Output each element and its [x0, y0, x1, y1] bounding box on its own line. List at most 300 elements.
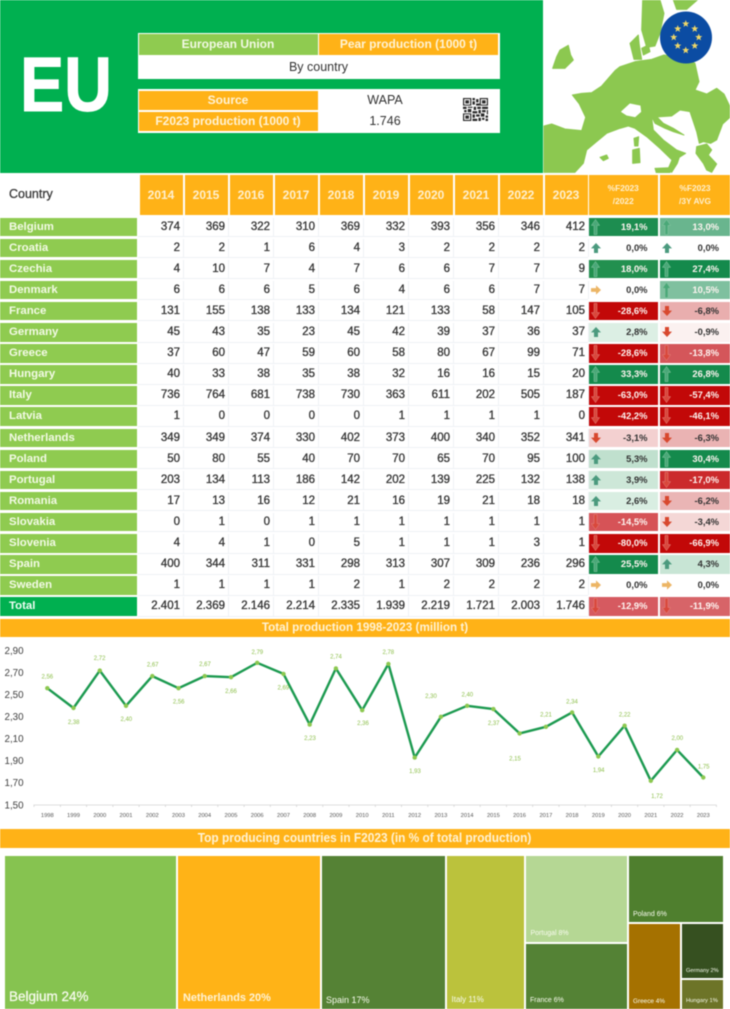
- row: Hungary: 33,3%: [621, 368, 648, 379]
- row: Italy: 736: [161, 389, 180, 401]
- row: Germany: 36: [527, 326, 540, 338]
- row: Portugal: 113: [252, 474, 270, 486]
- row: Czechia: 7: [489, 263, 495, 275]
- x axis year labels: 2005: [225, 813, 237, 819]
- row: Slovakia: -3,4%: [694, 516, 719, 527]
- row: Denmark: 6: [354, 284, 360, 296]
- x axis year labels: 2010: [356, 813, 369, 819]
- row: Romania: 13: [212, 495, 225, 507]
- row: Spain: [0, 554, 730, 575]
- x axis year labels: 2021: [644, 813, 657, 819]
- row: Sweden: 1: [264, 579, 270, 591]
- row: Czechia: [0, 259, 730, 279]
- row: Total: 2.214: [286, 600, 315, 612]
- x axis year labels: 2007: [277, 813, 290, 819]
- row: Sweden: 1: [399, 579, 405, 591]
- tile: Germany: [682, 924, 723, 978]
- data labels: 2,74: [330, 654, 342, 660]
- year head 2019: [364, 175, 408, 215]
- label: European Union: [138, 34, 318, 54]
- row: Romania: 17: [167, 495, 180, 507]
- row: Poland: 70: [347, 453, 360, 465]
- row: France: France: [9, 305, 46, 317]
- tile: Hungary: Hungary 1%: [686, 998, 718, 1004]
- row: Spain: 311: [252, 558, 270, 570]
- row: Slovenia: 3: [534, 537, 540, 549]
- row: Latvia: 1: [444, 410, 450, 422]
- data labels: 2,36: [357, 721, 369, 727]
- row: Portugal: 202: [386, 474, 405, 486]
- row: Germany: 23: [302, 326, 315, 338]
- data labels: 2,79: [251, 650, 264, 656]
- row: Spain: 298: [341, 558, 360, 570]
- label: Pear production: [319, 34, 498, 54]
- row: Czechia: 27,4%: [692, 263, 719, 274]
- row: Hungary: 32: [392, 368, 405, 380]
- map: Sardinia: [633, 148, 640, 163]
- x axis year labels: 2023: [697, 813, 710, 819]
- year head 2014: [140, 175, 182, 215]
- row: Portugal: 225: [476, 474, 495, 486]
- row: Denmark: 6: [489, 284, 495, 296]
- treemap: top producing countries: [4, 855, 724, 1009]
- year head 2018: [320, 175, 362, 215]
- row: Romania: 19: [437, 495, 450, 507]
- row: Sweden: 0,0%: [698, 579, 719, 590]
- x axis year labels: [41, 813, 710, 819]
- row: Croatia: 0,0%: [698, 242, 719, 253]
- row: France: 133: [296, 305, 315, 317]
- row: Total: -12,9%: [618, 600, 648, 611]
- year head 2016: [230, 175, 272, 215]
- info box: source and production: [138, 88, 500, 132]
- map: mainland: [544, 55, 730, 172]
- head: F2023 vs 3Y average: /3Y AVG: [679, 196, 711, 206]
- row: Total: 1.721: [466, 600, 495, 612]
- x axis year labels: 1999: [67, 813, 80, 819]
- row: Slovakia: 1: [354, 516, 360, 528]
- row: Romania: 21: [347, 495, 360, 507]
- row: France: 121: [386, 305, 405, 317]
- icon: EU flag: [660, 12, 712, 64]
- row: Netherlands: -6,3%: [694, 432, 719, 442]
- y axis labels: 2,70: [4, 668, 24, 679]
- row: Portugal: 138: [566, 474, 585, 486]
- row: Sweden: 2: [579, 579, 585, 591]
- tile: Poland: Poland 6%: [633, 910, 667, 918]
- tile: Spain: [322, 856, 445, 1009]
- row: Latvia: 0: [264, 410, 270, 422]
- row: Denmark: 6: [174, 284, 180, 296]
- data labels: 2,38: [68, 720, 80, 726]
- tile: Greece: [629, 924, 680, 1009]
- label: F2023 production: F2023 production (1000 t): [155, 114, 301, 128]
- icon: QR code: [462, 97, 489, 122]
- row: Latvia: 0: [309, 410, 315, 422]
- row: Slovakia: 1: [399, 516, 405, 528]
- row: Slovakia: -14,5%: [618, 516, 648, 527]
- row: Germany: [0, 322, 730, 343]
- map: Balearic islands: [600, 155, 608, 161]
- x axis year labels: 2009: [329, 813, 342, 819]
- row: Belgium: 356: [476, 220, 495, 232]
- row: Slovakia: 1: [219, 516, 225, 528]
- row: Croatia: 2: [174, 242, 180, 254]
- row: France: 131: [161, 305, 180, 317]
- data labels: 1,72: [651, 794, 663, 800]
- row: Italy: 505: [521, 389, 540, 401]
- row: Latvia: Latvia: [9, 410, 42, 422]
- row: Greece: -13,8%: [689, 347, 719, 358]
- label: By country: [138, 55, 498, 78]
- row: Netherlands: 374: [251, 432, 270, 444]
- row: Slovakia: 0: [174, 516, 180, 528]
- row: Sweden: 2: [534, 579, 540, 591]
- year head 2017: 2017: [283, 188, 309, 202]
- row: Netherlands: 373: [386, 432, 405, 444]
- map: Greece: [696, 144, 717, 172]
- row: Sweden: 1: [309, 579, 315, 591]
- tile: Belgium: Belgium 24%: [9, 989, 89, 1004]
- row: Germany: 43: [212, 326, 225, 338]
- row: Latvia: [0, 406, 730, 427]
- data labels: 1,94: [593, 768, 605, 774]
- row: Poland: 30,4%: [692, 453, 719, 464]
- row: Slovenia: 5: [354, 537, 360, 549]
- row: Total: 1.939: [376, 600, 405, 612]
- year head 2015: 2015: [193, 188, 219, 202]
- row: Latvia: 1: [534, 410, 540, 422]
- row: Germany: 45: [347, 326, 360, 338]
- row: Belgium: 19,1%: [621, 220, 648, 232]
- row: Denmark: 6: [444, 284, 450, 296]
- row: Croatia: [0, 238, 720, 258]
- row: Romania: Romania: [9, 495, 57, 507]
- row: Netherlands: 349: [206, 432, 225, 444]
- row: Netherlands: 341: [566, 432, 585, 444]
- data labels: 1,93: [409, 769, 421, 775]
- production line: [47, 663, 703, 781]
- row: Germany: 2,8%: [626, 326, 648, 337]
- row: Belgium: [0, 217, 730, 237]
- row: Slovakia: 1: [489, 516, 495, 528]
- data labels: 2,34: [566, 699, 578, 705]
- row: Romania: 21: [482, 495, 495, 507]
- row: Sweden: [0, 575, 720, 596]
- x axis year labels: 2012: [408, 813, 421, 819]
- row: Romania: 18: [572, 495, 585, 507]
- row: Hungary: Hungary: [9, 368, 55, 380]
- row: Italy: -63,0%: [618, 389, 648, 400]
- row: Netherlands: 352: [521, 432, 540, 444]
- row: France: -6,8%: [694, 305, 719, 316]
- row: Greece: 60: [347, 347, 360, 359]
- head: F2023 vs 2022: [589, 175, 658, 215]
- row: Portugal: Portugal: [9, 474, 55, 486]
- year head 2023: 2023: [553, 188, 579, 202]
- row: Netherlands: 340: [476, 432, 495, 444]
- row: Greece: 37: [167, 347, 180, 359]
- x axis year labels: 2001: [120, 813, 132, 819]
- y axis labels: 2,90: [4, 646, 24, 657]
- row: Hungary: 15: [527, 368, 540, 380]
- row: Total: 2.335: [331, 600, 360, 612]
- row: Greece: 67: [482, 347, 495, 359]
- row: Spain: Spain: [9, 558, 40, 570]
- row: Croatia: 3: [399, 242, 405, 254]
- y axis labels: 2,30: [4, 712, 24, 723]
- row: Germany: -0,9%: [694, 326, 719, 337]
- map: Corsica: [634, 137, 639, 146]
- row: Latvia: -46,1%: [689, 410, 719, 421]
- tile: Portugal: [526, 856, 627, 942]
- row: Portugal: 134: [206, 474, 225, 486]
- y axis labels: 2,10: [4, 734, 24, 745]
- x axis year labels: 2016: [513, 813, 526, 819]
- row: Total: -11,9%: [690, 600, 719, 611]
- row: France: 138: [251, 305, 270, 317]
- row: France: 155: [206, 305, 225, 317]
- row: Czechia: 4: [309, 263, 315, 275]
- row: Czechia: 7: [264, 263, 270, 275]
- data labels: 2,67: [199, 662, 211, 668]
- tile: Spain: Spain 17%: [326, 994, 370, 1004]
- row: Hungary: 38: [257, 368, 270, 380]
- row: France: 58: [482, 305, 495, 317]
- row: Latvia: 1: [489, 410, 495, 422]
- row: Germany: 42: [392, 326, 405, 338]
- row: Denmark: Denmark: [9, 284, 58, 296]
- map: Danish islands: [642, 45, 650, 55]
- header band: [0, 0, 730, 174]
- year head 2022: 2022: [508, 188, 534, 202]
- row: Belgium: 310: [296, 220, 315, 232]
- value: WAPA: [318, 91, 452, 110]
- row: Romania: 12: [302, 495, 315, 507]
- x axis year labels: 2018: [566, 813, 579, 819]
- row: Belgium: 13,0%: [692, 220, 719, 232]
- row: Poland: 100: [566, 453, 585, 465]
- row: Sweden: 2: [489, 579, 495, 591]
- row: Italy: 681: [251, 389, 270, 401]
- row: Netherlands: Netherlands: [9, 432, 75, 444]
- row: Belgium: 332: [386, 220, 405, 232]
- row: Greece: 58: [392, 347, 405, 359]
- row: Slovenia: 0: [309, 537, 315, 549]
- data labels: 2,78: [382, 650, 395, 656]
- row: Poland: 95: [527, 453, 540, 465]
- row: Romania: 16: [392, 495, 405, 507]
- year head 2015: [184, 175, 228, 215]
- row: Belgium: 322: [251, 220, 270, 232]
- row: Spain: 4,3%: [698, 558, 719, 569]
- row: Poland: [0, 449, 730, 469]
- tile: Netherlands: [178, 856, 320, 1009]
- x axis year labels: 2013: [434, 813, 447, 819]
- row: Croatia: Croatia: [9, 242, 48, 254]
- map: Switzerland gap: [622, 104, 641, 117]
- row: Slovenia: 4: [219, 537, 225, 549]
- row: Slovenia: 1: [444, 537, 450, 549]
- row: Belgium: 369: [341, 220, 360, 232]
- row: Poland: Poland: [9, 453, 47, 465]
- row: Slovakia: Slovakia: [9, 516, 55, 528]
- row: Poland: 50: [167, 453, 180, 465]
- row: Belgium: 346: [521, 220, 540, 232]
- column head: Country: Country: [9, 187, 53, 201]
- row: Latvia: 0: [219, 410, 225, 422]
- x axis year labels: 2022: [671, 813, 684, 819]
- y axis labels: 1,50: [4, 800, 24, 812]
- data labels: 2,37: [488, 721, 500, 727]
- row: Sweden: 2: [444, 579, 450, 591]
- tile: France: France 6%: [530, 997, 564, 1004]
- row: Croatia: 2: [489, 242, 495, 254]
- row: Slovenia: 1: [399, 537, 405, 549]
- value: 1.746: 1.746: [369, 114, 401, 128]
- row: Slovenia: -80,0%: [618, 537, 648, 548]
- x axis year labels: 2000: [93, 813, 106, 819]
- row: Total: Total: [9, 600, 35, 612]
- year head 2017: [274, 175, 318, 215]
- row: Sweden: 2: [354, 579, 360, 591]
- row: Croatia: 2: [219, 242, 225, 254]
- data labels: 1,75: [698, 764, 710, 770]
- row: Romania: -6,2%: [694, 495, 719, 506]
- row: Portugal: 186: [296, 474, 315, 486]
- row: Greece: Greece: [9, 347, 48, 359]
- row: Poland: 70: [482, 453, 495, 465]
- row: Denmark: 0,0%: [626, 284, 648, 295]
- tile: Italy: [447, 856, 524, 1009]
- data point markers: [45, 661, 706, 783]
- x axis year labels: 2008: [303, 813, 316, 819]
- value: WAPA: WAPA: [367, 93, 403, 107]
- year head 2022: [500, 175, 542, 215]
- x axis line: [34, 805, 716, 807]
- info box: region and product: [138, 33, 500, 78]
- row: Belgium: 369: [206, 220, 225, 232]
- row: Italy: 730: [341, 389, 360, 401]
- row: France: 133: [431, 305, 450, 317]
- row: Total: [0, 596, 730, 617]
- label: Source: [138, 91, 318, 110]
- row: France: 147: [521, 305, 540, 317]
- row: Greece: 59: [302, 347, 315, 359]
- row: Hungary: 33: [212, 368, 225, 380]
- row: Portugal: [0, 470, 730, 490]
- tile: Greece: Greece 4%: [633, 998, 665, 1004]
- row: Spain: 309: [476, 558, 495, 570]
- section heading: top producing countries: Top producing countries in F2023 (in % of total production): [198, 831, 532, 845]
- x axis year labels: 2011: [382, 813, 395, 819]
- row: Hungary: 26,8%: [692, 368, 719, 379]
- row: Total: 2.369: [196, 600, 225, 612]
- row: Italy: 202: [476, 389, 495, 401]
- x axis year labels: 2015: [487, 813, 500, 819]
- tile: Netherlands: Netherlands 20%: [183, 992, 271, 1004]
- label: Source: Source: [208, 93, 248, 107]
- row: Spain: 25,5%: [621, 558, 648, 569]
- data labels: 2,23: [304, 736, 316, 742]
- year head 2023: [544, 175, 588, 215]
- head: F2023 vs 2022: /2022: [613, 196, 634, 206]
- row: Denmark: 6: [219, 284, 225, 296]
- data labels: 2,69: [277, 685, 290, 691]
- row: Portugal: 132: [521, 474, 540, 486]
- row: France: 105: [566, 305, 585, 317]
- x axis year labels: 2003: [172, 813, 185, 819]
- row: Netherlands: 400: [431, 432, 450, 444]
- row: Latvia: 1: [174, 410, 180, 422]
- green background panel: [0, 0, 543, 172]
- year head 2020: [410, 175, 452, 215]
- row: Poland: 80: [212, 453, 225, 465]
- row: Denmark: [0, 280, 730, 300]
- year head 2021: [454, 175, 498, 215]
- map: Sicily: [655, 168, 672, 174]
- row: Denmark: 7: [534, 284, 540, 296]
- year head 2019: 2019: [373, 188, 399, 202]
- row: Portugal: 139: [431, 474, 450, 486]
- row: Netherlands: 402: [341, 432, 360, 444]
- tile: France: [526, 944, 627, 1009]
- row: Greece: 80: [437, 347, 450, 359]
- row: Netherlands: 349: [161, 432, 180, 444]
- row: Croatia: 0,0%: [626, 242, 648, 253]
- tile: Italy: Italy 11%: [452, 995, 484, 1004]
- row: Slovenia: 1: [489, 537, 495, 549]
- tile: Belgium: [4, 856, 176, 1009]
- row: France: -28,6%: [618, 305, 648, 316]
- head: F2023 vs 3Y average: %F2023: [679, 182, 711, 192]
- row: Hungary: 38: [347, 368, 360, 380]
- row: Sweden: 1: [219, 579, 225, 591]
- data labels: 2,40: [120, 717, 133, 723]
- row: Sweden: 0,0%: [626, 579, 648, 590]
- x axis year labels: 2002: [146, 813, 159, 819]
- row: Poland: 5,3%: [626, 453, 648, 464]
- row: Germany: 37: [572, 326, 585, 338]
- row: Latvia: -42,2%: [618, 410, 648, 421]
- data labels: 2,56: [173, 699, 185, 705]
- y axis labels: [4, 646, 24, 812]
- year head 2018: 2018: [328, 188, 354, 202]
- head: F2023 vs 3Y average: [660, 175, 730, 215]
- row: Greece: [0, 343, 730, 364]
- row: Czechia: 6: [444, 263, 450, 275]
- x axis year labels: 2017: [539, 813, 552, 819]
- row: Czechia: 6: [399, 263, 405, 275]
- row: Germany: 35: [257, 326, 270, 338]
- row: Germany: 39: [437, 326, 450, 338]
- year head 2021: 2021: [463, 188, 489, 202]
- row: Italy: -57,4%: [689, 389, 719, 400]
- row: Latvia: 1: [399, 410, 405, 422]
- row: Czechia: Czechia: [9, 263, 52, 275]
- x axis year labels: 1998: [41, 813, 54, 819]
- row: Romania: 16: [257, 495, 270, 507]
- map: Sweden: [642, 0, 664, 47]
- row: Czechia: 18,0%: [621, 263, 648, 274]
- row: Total: 2.003: [511, 600, 540, 612]
- row: Czechia: 10: [212, 263, 225, 275]
- data labels: 2,40: [461, 692, 474, 698]
- row: Greece: 47: [257, 347, 270, 359]
- map of the European Union: [542, 0, 730, 174]
- row: Germany: 45: [167, 326, 180, 338]
- row: Belgium: 374: [161, 220, 180, 232]
